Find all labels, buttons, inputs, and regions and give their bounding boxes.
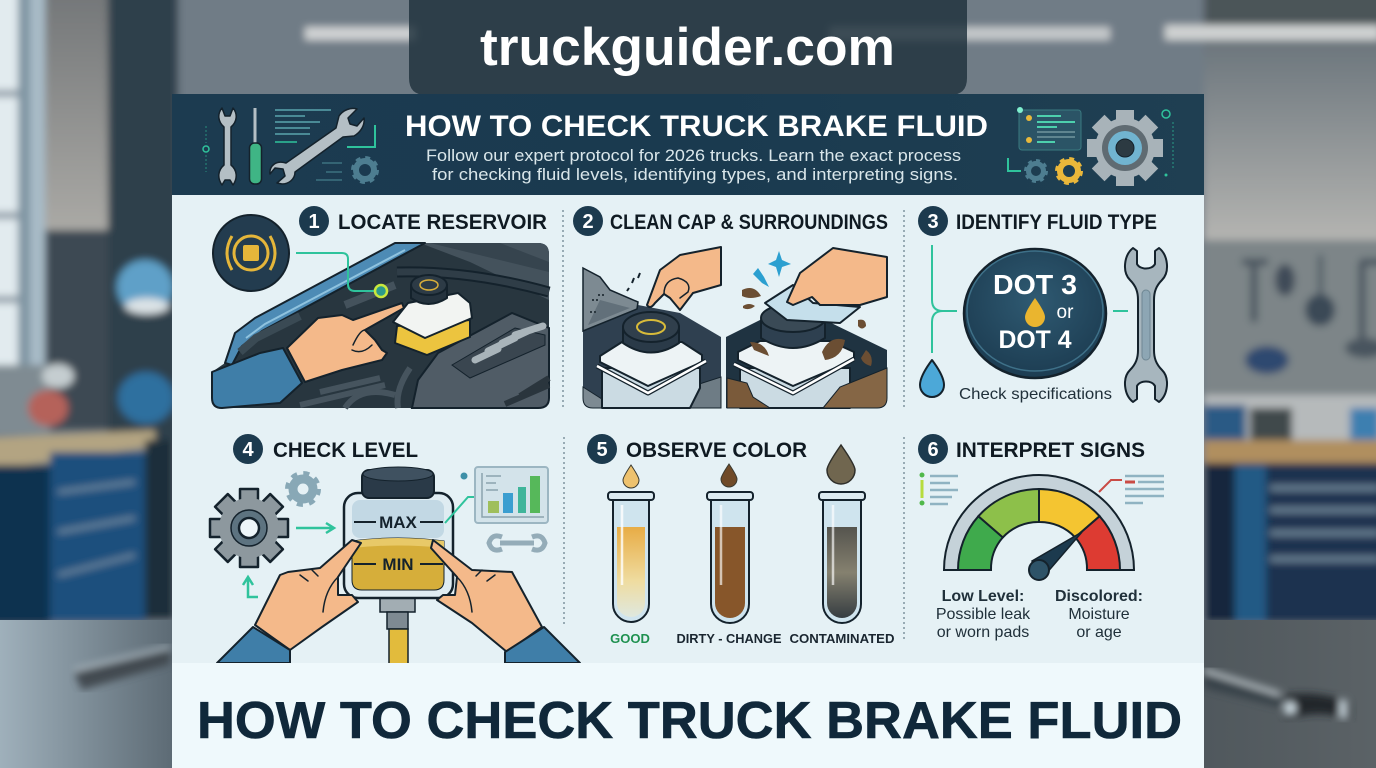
right wall [1204, 0, 1376, 25]
gauge [944, 475, 1134, 580]
step 2 heading: CLEAN CAP & SURROUNDINGS [610, 211, 888, 234]
step 1 heading: LOCATE RESERVOIR [338, 211, 547, 234]
left header tools icons [203, 108, 377, 185]
DOT badge: or [1057, 302, 1074, 323]
reservoir jar: MAX [379, 513, 418, 532]
label: DIRTY - CHANGE [676, 631, 782, 646]
subtitle: for checking fluid levels, identifying types, and interpreting signs. [432, 166, 958, 184]
step 6: interpret signs [918, 434, 1164, 641]
reservoir jar [344, 467, 453, 664]
step 3 heading: IDENTIFY FLUID TYPE [956, 211, 1157, 234]
low level text: Low Level: [942, 588, 1024, 605]
step 4: check level [210, 434, 580, 664]
step 2 heading [573, 206, 888, 236]
step 5 heading [587, 434, 807, 464]
green arrows [243, 523, 334, 597]
callout connector [296, 253, 387, 297]
subtitle: Follow our expert protocol for 2026 trucks. Learn the exact process [426, 147, 961, 165]
right image: dirty cap being wiped [726, 248, 887, 408]
step 3 heading: 3 [927, 211, 939, 233]
right legend lines [1099, 476, 1164, 503]
right header gear icons [1008, 107, 1173, 186]
title: HOW TO CHECK TRUCK BRAKE FLUID [405, 110, 988, 143]
label: GOOD [610, 631, 650, 646]
right sleeve [505, 627, 580, 663]
main panel background [172, 94, 1204, 768]
low level text [936, 588, 1031, 641]
reservoir [393, 275, 472, 355]
reservoir jar: MIN [382, 555, 414, 574]
rocks [727, 378, 770, 408]
left hand [255, 540, 361, 650]
step 4 heading [233, 434, 418, 464]
large gear [210, 489, 288, 567]
DOT badge: DOT 4 [998, 326, 1072, 354]
step 5 heading: 5 [596, 439, 608, 461]
label: CONTAMINATED [790, 631, 894, 646]
blue drop [920, 360, 944, 397]
step 6 heading: 6 [927, 439, 939, 461]
low level text: Possible leak [936, 606, 1031, 623]
right wrench [1204, 670, 1350, 720]
step 4 heading: 4 [242, 439, 254, 461]
step 3 heading [918, 206, 1157, 236]
discolored text: Discolored: [1055, 588, 1143, 605]
good tube [608, 465, 654, 646]
sparkles [753, 251, 791, 287]
step 2 heading: 2 [582, 211, 594, 233]
table top [0, 620, 1376, 768]
step 3: identify fluid type [918, 206, 1167, 403]
needle [1032, 532, 1082, 575]
cloth [765, 285, 860, 323]
left window [0, 0, 18, 365]
step 6 heading [918, 434, 1145, 464]
right cabinet [1204, 463, 1376, 623]
dirt specks [742, 288, 872, 366]
brake warning icon [213, 215, 289, 291]
subtitle [426, 147, 961, 184]
ceiling lights [305, 27, 415, 40]
site name: truckguider.com [480, 18, 895, 77]
left legend lines [920, 472, 958, 506]
hand pointing at reservoir [287, 303, 404, 382]
bench clutter left [117, 260, 173, 314]
discolored text: Moisture [1068, 606, 1130, 623]
wrench [1125, 248, 1167, 402]
hood edge [225, 243, 425, 365]
step 1: locate reservoir [212, 206, 549, 408]
level chart [445, 467, 548, 523]
small wrench [489, 536, 545, 550]
left sleeve [217, 627, 290, 663]
step 1 heading: 1 [308, 211, 320, 233]
step 5 heading: OBSERVE COLOR [626, 439, 807, 462]
engine pipes [300, 368, 410, 408]
sleeve [212, 348, 302, 408]
left wrench [74, 646, 170, 690]
right hand [431, 540, 542, 652]
step 6 heading: INTERPRET SIGNS [956, 439, 1145, 462]
discolored text: or age [1076, 624, 1122, 641]
left cabinet [0, 465, 50, 625]
contaminated tube [790, 445, 894, 646]
left image: clean cap [583, 247, 721, 408]
DOT badge [964, 249, 1106, 378]
header band [172, 94, 1204, 195]
footer band [172, 663, 1204, 768]
discolored text [1055, 588, 1143, 641]
step 5: observe color [587, 434, 894, 646]
hand pinching [647, 247, 721, 310]
low level text: or worn pads [937, 624, 1029, 641]
footer title: HOW TO CHECK TRUCK BRAKE FLUID [197, 692, 1182, 750]
step 4 heading: CHECK LEVEL [273, 439, 418, 462]
small gear [288, 474, 318, 504]
wiping hand [787, 248, 887, 305]
dotted dividers [563, 210, 904, 640]
bracket connector [932, 245, 1128, 353]
step 1 heading [299, 206, 547, 236]
step 2: clean cap [573, 206, 888, 408]
engine bay illustration [212, 243, 549, 408]
dirty tube [676, 464, 782, 646]
pegboard tools [1242, 262, 1376, 342]
check specifications: Check specifications [959, 386, 1112, 403]
site banner [409, 0, 967, 95]
reservoir body [602, 368, 700, 408]
engine cover [412, 313, 549, 408]
DOT badge: DOT 3 [993, 269, 1077, 300]
